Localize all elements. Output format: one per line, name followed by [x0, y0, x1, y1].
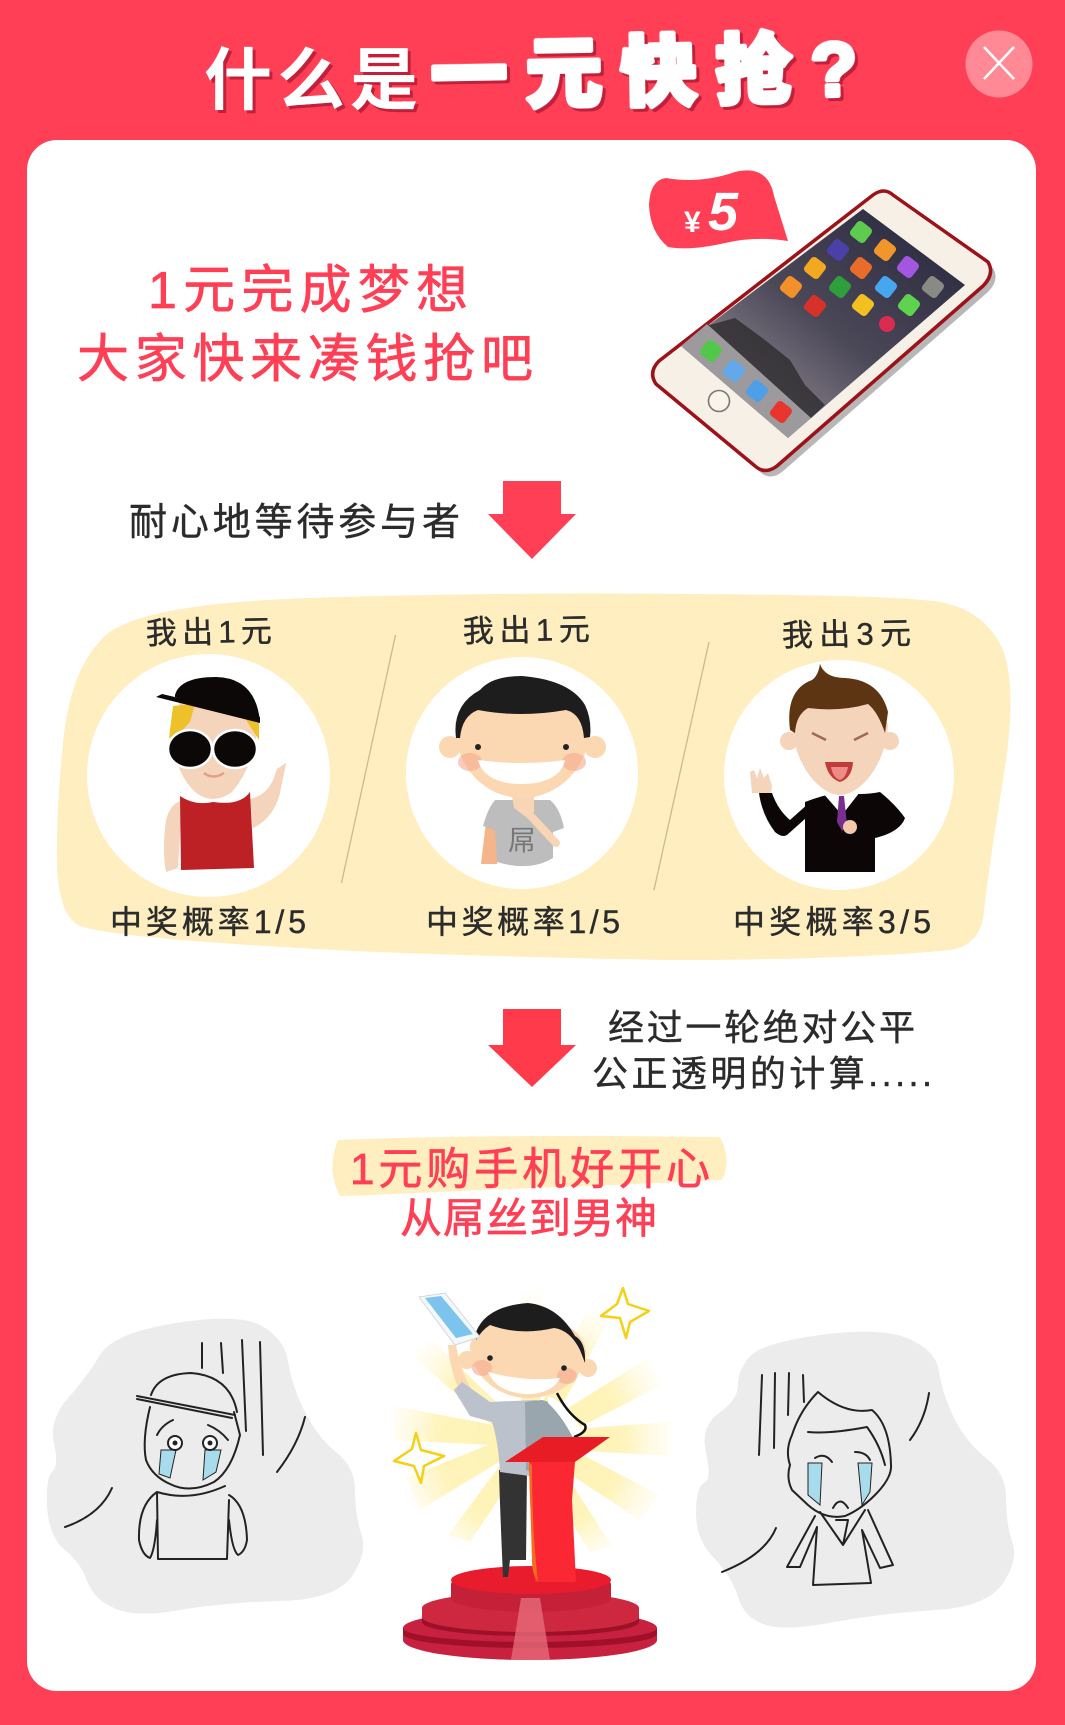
phone body — [653, 191, 991, 470]
participant 2 — [406, 612, 638, 940]
rain lines left — [65, 1340, 305, 1527]
text: fair calculation — [592, 1007, 932, 1094]
arrow: down 2 — [488, 1009, 576, 1087]
phone shadow — [658, 197, 996, 476]
title: bold part: 一元快抢? — [430, 27, 858, 120]
phone mountains — [707, 318, 825, 418]
phone screen — [681, 209, 965, 438]
podium tier 2 — [422, 1592, 639, 1634]
winner legs — [499, 1470, 527, 1577]
crying figure left — [137, 1373, 247, 1559]
callout: price bubble: ¥ — [684, 206, 701, 239]
text: fair calculation: 经过一轮绝对公平 — [608, 1007, 915, 1048]
illustration: sad cool guy — [47, 1319, 363, 1614]
participant 2: 中奖概率1/5 — [426, 904, 620, 940]
panel background blob — [57, 594, 1010, 960]
arrow: down 1 — [488, 481, 576, 559]
character: plain guy: 屌 — [508, 825, 536, 856]
illustration: winner on podium — [393, 1288, 672, 1660]
microphone wire — [557, 1393, 586, 1437]
illustration: sad businessman — [696, 1332, 1014, 1628]
home button — [708, 390, 730, 412]
gray cloud left — [47, 1319, 363, 1614]
participant 2: 我出1元 — [463, 612, 590, 649]
sun rays — [393, 1290, 672, 1552]
participant 1 — [87, 614, 330, 940]
podium tier 3 — [403, 1610, 657, 1660]
heading: dream slogan: 1元完成梦想 — [148, 262, 468, 320]
winner raised arm — [448, 1345, 472, 1396]
podium tier 3 rim — [403, 1628, 657, 1648]
callout: price bubble: 5 — [708, 182, 739, 242]
podium tier 1 — [451, 1570, 611, 1612]
character: plain guy — [439, 676, 606, 866]
rain lines right — [722, 1373, 929, 1572]
heading: happy result: 从屌丝到男神 — [400, 1195, 657, 1242]
highlight stripe — [332, 1136, 727, 1196]
participant 3: 我出3元 — [782, 616, 911, 653]
phone dock — [681, 324, 811, 438]
close button — [966, 30, 1032, 98]
divider lines — [342, 635, 709, 890]
heading: dream slogan: 大家快来凑钱抢吧 — [77, 331, 533, 389]
heading: dream slogan — [77, 262, 533, 389]
participant 3 — [724, 616, 954, 940]
winner shirt — [454, 1382, 580, 1480]
title — [204, 27, 858, 120]
app icons — [698, 219, 946, 425]
text: fair calculation: 公正透明的计算..... — [592, 1053, 932, 1094]
pedestal number one — [505, 1437, 610, 1582]
heading: happy result — [350, 1145, 710, 1242]
heading: happy result: 1元购手机好开心 — [350, 1145, 710, 1194]
raised phone — [419, 1293, 480, 1345]
crying figure right — [787, 1392, 893, 1585]
participant 1: 中奖概率1/5 — [110, 904, 306, 940]
icon: iphone — [653, 191, 996, 476]
podium stripe — [511, 1598, 550, 1660]
participant 3: 中奖概率3/5 — [733, 904, 931, 940]
title: plain part: 什么是 — [204, 43, 418, 119]
callout: price bubble — [649, 170, 788, 248]
text: waiting for participants: 耐心地等待参与者 — [129, 502, 460, 544]
podium top — [451, 1566, 611, 1594]
character: cool guy — [156, 677, 284, 872]
winner head — [458, 1351, 476, 1369]
sparkle stars — [601, 1288, 649, 1338]
panel: participants — [57, 594, 1010, 960]
character: businessman — [750, 664, 905, 872]
podium tier 2 rim — [422, 1617, 639, 1636]
gray cloud right — [696, 1332, 1014, 1628]
participant 1: 我出1元 — [146, 614, 272, 651]
